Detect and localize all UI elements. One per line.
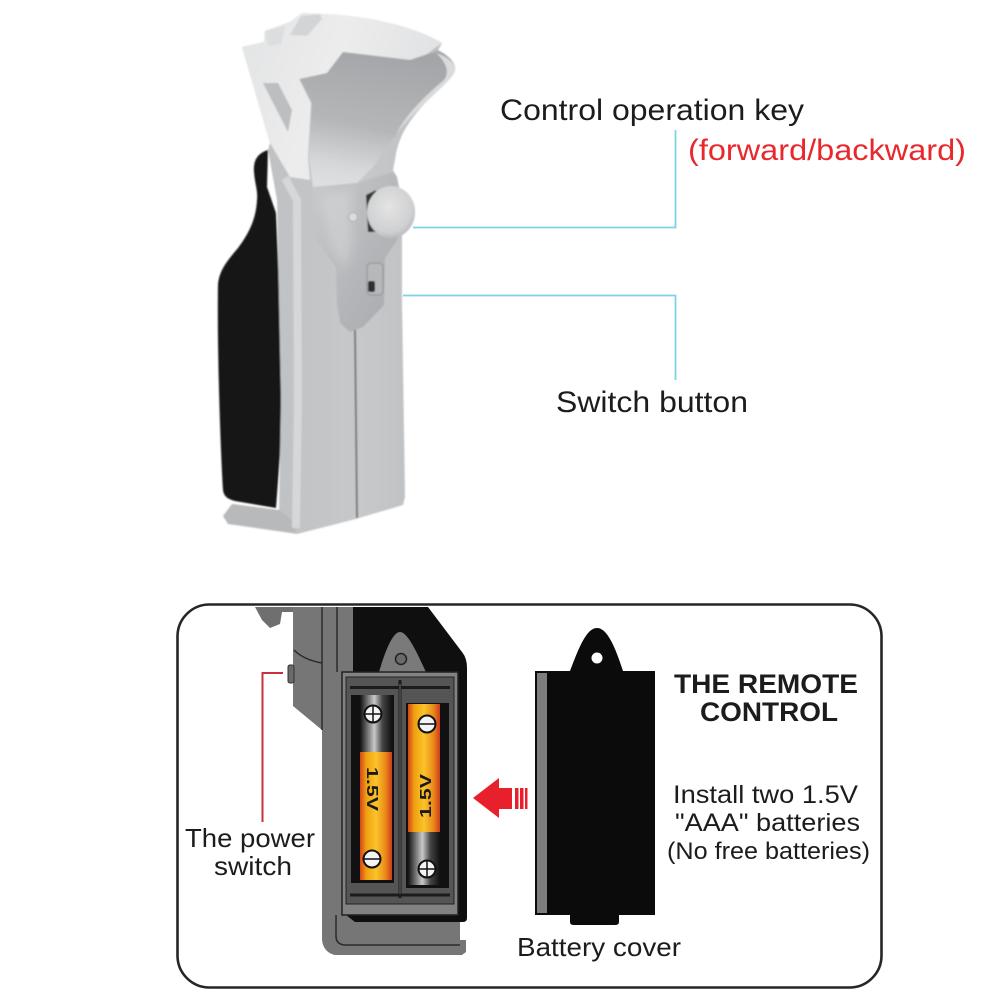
- tab hole: [396, 654, 406, 664]
- label: control operation key: Control operation key: [500, 94, 804, 127]
- remote head cap: [242, 13, 442, 180]
- remote cutaway illustration: [255, 607, 467, 955]
- battery compartment: [342, 672, 458, 915]
- face bright tip: [397, 53, 455, 133]
- black side grip: [218, 150, 284, 508]
- base lip shading: [223, 504, 296, 533]
- shell edge lines: [294, 607, 460, 945]
- recessed face: [300, 51, 455, 187]
- label: the power switch: [185, 823, 315, 881]
- arrow: insert cover: [473, 778, 528, 818]
- text: battery instructions: "AAA" batteries: [675, 809, 860, 837]
- label: battery cover: Battery cover: [517, 932, 681, 962]
- battery 2: 1.5V: [418, 774, 435, 818]
- product photo: remote control: [218, 13, 455, 534]
- label: switch button: Switch button: [556, 386, 748, 419]
- label: forward/backward: (forward/backward): [688, 134, 966, 167]
- heading: the remote control: CONTROL: [700, 697, 838, 727]
- hanging tab: [379, 632, 426, 672]
- compartment divider and clips: [350, 680, 450, 898]
- remote silhouette: grey shell: [223, 13, 455, 534]
- text: battery instructions: [667, 781, 870, 865]
- plate centre highlight: [320, 190, 352, 270]
- battery 2: [406, 703, 449, 888]
- heading: the remote control: THE REMOTE: [674, 669, 858, 699]
- power switch pointer line: [262, 673, 283, 822]
- callout line: switch button: [403, 296, 676, 380]
- control panel plate: [312, 172, 400, 332]
- battery 1: 1.5V: [363, 767, 380, 811]
- switch button: [367, 263, 383, 295]
- switch nub: [288, 665, 294, 683]
- callout line: control operation key: [413, 130, 676, 228]
- rocker shading: [265, 26, 285, 46]
- black interior: [346, 607, 467, 922]
- battery cover: [535, 628, 655, 925]
- body front edge highlight: [285, 178, 298, 528]
- head side window: [263, 83, 292, 132]
- heading: the remote control: [674, 669, 858, 727]
- grey remote shell: [293, 607, 466, 955]
- body seam: [355, 330, 357, 518]
- panel: battery installation: [178, 604, 882, 988]
- label: the power switch: switch: [214, 851, 292, 881]
- battery 1: [351, 695, 394, 883]
- top knob stub: [255, 607, 294, 628]
- control operation key knob: [348, 186, 415, 238]
- mode bump: [290, 14, 322, 36]
- label: the power switch: The power: [185, 823, 315, 853]
- text: battery instructions: Install two 1.5V: [673, 781, 858, 809]
- text: battery instructions: (No free batteries): [667, 838, 870, 865]
